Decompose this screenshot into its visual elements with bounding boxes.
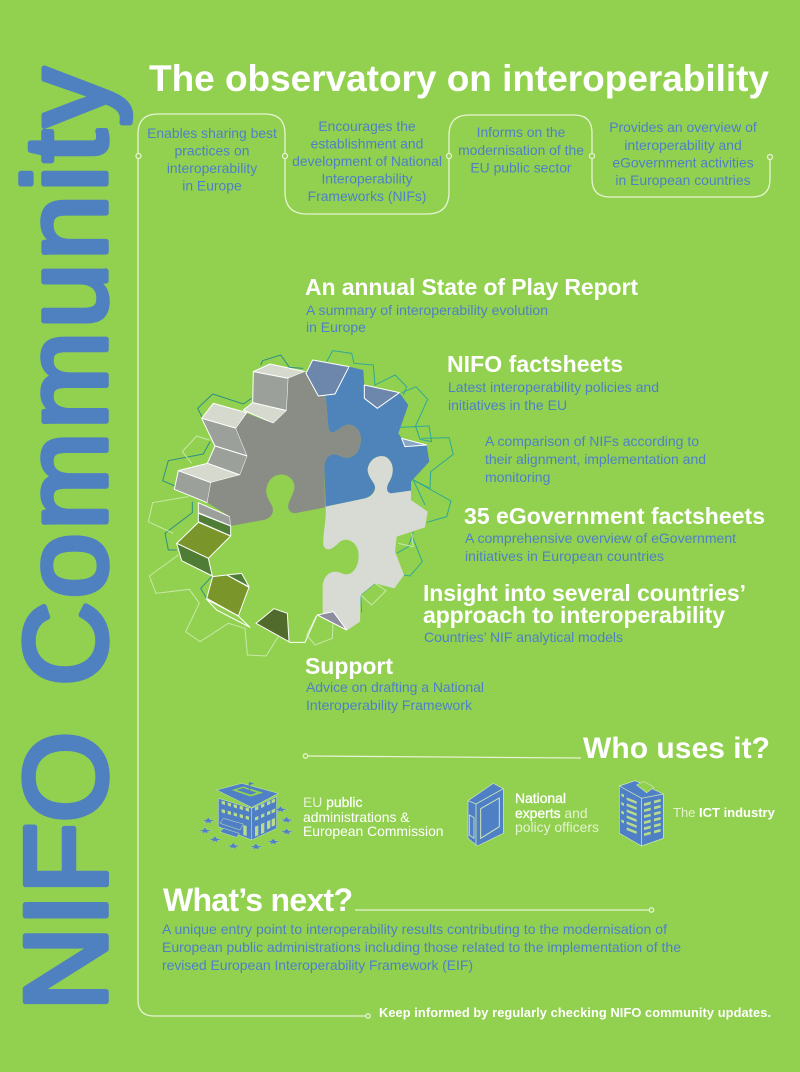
panel: enables sharing: Enables sharing best [147,125,277,141]
item: comparison of NIFs: monitoring [485,469,550,485]
label: EU public administrations [303,794,444,839]
panel: enables sharing: interoperability [167,160,257,176]
panel: encourages NIFs: development of National [292,153,442,169]
text block: what's next description: A unique entry point to interoperability results contributing to the modernisation of [162,921,667,937]
panel: provides overview: in European countries [615,172,751,188]
text block: what's next description [162,921,681,973]
panel: encourages NIFs: Interoperability [321,170,413,186]
vertical title: NIFO Community: NIFO [0,732,131,1011]
item: comparison of NIFs: A comparison of NIFs according to [485,433,699,449]
main title: The observatory on interoperability [149,58,769,99]
gear puzzle illustration [148,351,453,656]
item: support: Support [305,653,393,679]
item: insight into countries' approaches [423,580,746,645]
item: insight into countries' approaches: Insight into several countries’ [423,580,746,606]
gear outline: left dark teal [163,355,303,598]
footer note: Keep informed by regularly checking NIFO community updates. [379,1005,771,1020]
label: EU public administrations: European Commission [303,823,444,839]
label: national experts: National [515,790,566,806]
gear outline: pale green [148,436,413,656]
panel: informs on modernisation: Informs on the [477,124,566,140]
panel: informs on modernisation [458,124,584,176]
item: NIFO factsheets [447,351,659,413]
item: insight into countries' approaches: Countries’ NIF analytical models [424,629,623,645]
item: annual State of Play report: An annual State of Play Report [305,274,638,300]
item: NIFO factsheets: initiatives in the EU [448,397,567,413]
connector frame line [136,114,772,1018]
panel: encourages NIFs [292,118,442,204]
item: support: Advice on drafting a National [306,679,484,695]
green tooth faces [177,513,289,642]
item: support [305,653,484,713]
text block: what's next description: European public administrations including those related to the implementation of the [162,939,681,955]
panel: informs on modernisation: modernisation of the [458,142,584,158]
panel: provides overview: interoperability and [624,137,742,153]
icon: EU building with stars [198,782,294,850]
label: national experts [515,790,599,835]
label: ICT industry: The ICT industry [673,805,776,820]
item: NIFO factsheets: Latest interoperability policies and [448,379,659,395]
heading: what's next: What’s next? [163,882,353,918]
gray puzzle piece [207,372,361,526]
panel: provides overview: Provides an overview of [609,119,757,135]
heading: who uses it [303,732,770,765]
blue tooth faces [306,360,427,630]
panel: enables sharing [147,125,277,194]
icon: book [468,783,503,846]
item: insight into countries' approaches: approach to interoperability [423,602,725,628]
icon: tower block [619,781,663,846]
heading: what's next [163,882,654,918]
panel: encourages NIFs: establishment and [311,136,423,152]
panel: enables sharing: practices on [175,142,249,158]
panel: informs on modernisation: EU public sector [470,160,572,176]
panel: provides overview: eGovernment activities [612,154,754,170]
panel: enables sharing: in Europe [182,178,242,194]
item: comparison of NIFs [485,433,706,485]
label: national experts: experts and [515,805,588,821]
panel: encourages NIFs: Encourages the [318,118,416,134]
text block: what's next description: revised European Interoperability Framework (EIF) [162,957,473,973]
blue puzzle piece [306,360,429,507]
item: 35 eGovernment factsheets: 35 eGovernment factsheets [464,503,765,529]
item: annual State of Play report: in Europe [306,319,366,335]
item: annual State of Play report: A summary of interoperability evolution [306,302,548,318]
light puzzle piece [323,456,428,631]
vertical title: NIFO Community [0,68,131,1011]
label: EU public administrations: administrations & [303,809,410,825]
panel: encourages NIFs: Frameworks (NIFs) [308,188,426,204]
item: comparison of NIFs: their alignment, implementation and [485,451,706,467]
vertical title: NIFO Community: Community [0,68,131,686]
item: support: Interoperability Framework [306,697,473,713]
heading: who uses it: Who uses it? [583,732,770,765]
label: national experts: policy officers [515,819,599,835]
gear outline: right teal [327,351,453,613]
item: annual State of Play report [305,274,638,335]
item: 35 eGovernment factsheets: initiatives in European countries [465,548,664,564]
panel: provides overview [609,119,757,188]
label: EU public administrations: EU public [303,794,363,810]
item: 35 eGovernment factsheets [464,503,765,564]
item: NIFO factsheets: NIFO factsheets [447,351,623,377]
item: 35 eGovernment factsheets: A comprehensive overview of eGovernment [465,530,736,546]
gray tooth faces [174,364,305,526]
